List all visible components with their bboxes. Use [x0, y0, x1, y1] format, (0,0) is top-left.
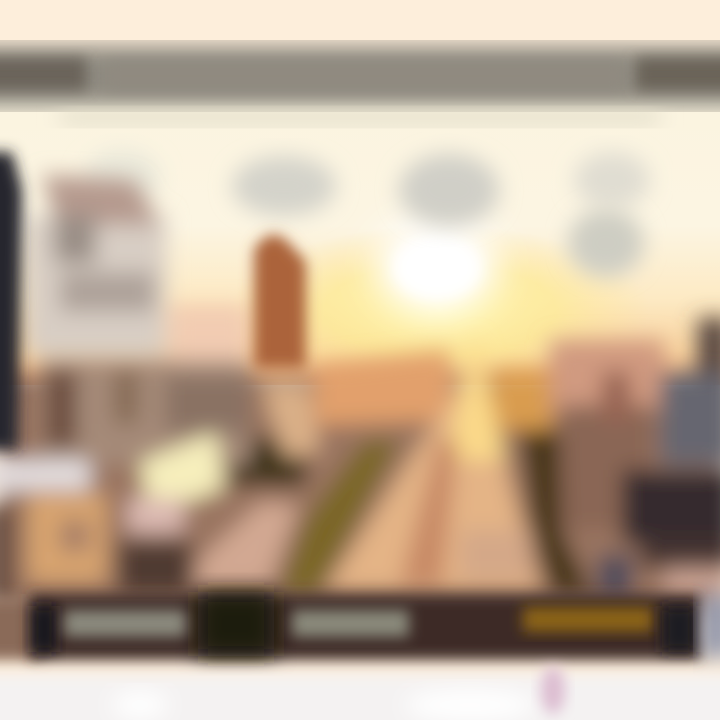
- heading text: [105, 62, 625, 90]
- tan building by tower: [262, 385, 320, 458]
- pink below awning: [128, 498, 183, 532]
- right building mid: [562, 405, 652, 530]
- orange tower: [254, 235, 306, 368]
- right dark block: [622, 470, 720, 544]
- window left: [46, 370, 76, 448]
- upper window block: [54, 215, 96, 263]
- bottom stat band: [0, 592, 720, 660]
- icon blob 4 bottom: [568, 209, 644, 277]
- far left base: [0, 505, 13, 605]
- dark brown base: [118, 540, 192, 596]
- right grey tower: [660, 372, 720, 464]
- stat label 3 highlighted: [523, 607, 653, 632]
- heading band left end: [0, 58, 86, 90]
- peach diagonal path: [195, 502, 298, 588]
- dark hedge blob: [228, 438, 306, 486]
- sun glow: [230, 217, 650, 395]
- pale building: [26, 215, 166, 355]
- road: [325, 360, 540, 590]
- grey white strip: [0, 460, 90, 490]
- roof: [42, 175, 160, 225]
- dark left tower: [0, 152, 22, 450]
- peach lower right: [665, 568, 720, 602]
- far right dark top: [698, 318, 720, 374]
- left brown base: [40, 360, 250, 465]
- peach haze: [170, 305, 250, 365]
- horizon orange left: [315, 350, 450, 425]
- ground base: [0, 375, 720, 610]
- storefront inner shade: [60, 520, 90, 552]
- icon blob 1: [84, 150, 160, 206]
- dark navy edge: [32, 606, 56, 652]
- icon blob 4 top: [574, 152, 650, 208]
- footer strip: [0, 666, 720, 720]
- footer white highlights: [112, 691, 168, 719]
- heading band: [0, 46, 720, 124]
- road rust stripe: [400, 440, 458, 585]
- icon blob 3: [399, 154, 499, 226]
- window right: [114, 370, 138, 424]
- right window spot: [602, 372, 630, 422]
- footer logo mark: [541, 666, 565, 714]
- heading band right end: [636, 58, 720, 90]
- grey-brown block: [165, 375, 250, 433]
- middle window row: [60, 272, 155, 312]
- white-yellow awning: [140, 432, 224, 516]
- tan storefront: [28, 494, 106, 582]
- horizon amber right: [492, 370, 552, 430]
- right building peach: [550, 340, 665, 410]
- blue-grey column: [598, 555, 632, 599]
- stat icons row: [84, 150, 650, 277]
- left road olive hedge: [278, 440, 400, 595]
- road lower pale: [460, 530, 530, 580]
- road bright ray: [445, 335, 505, 460]
- stat label 1: [64, 610, 186, 637]
- dark green panel: [198, 592, 274, 656]
- sky background: [0, 95, 720, 385]
- city scene: [0, 175, 720, 610]
- right hedge: [520, 430, 594, 596]
- stat label 2: [292, 610, 409, 637]
- icon blob 2: [232, 156, 336, 216]
